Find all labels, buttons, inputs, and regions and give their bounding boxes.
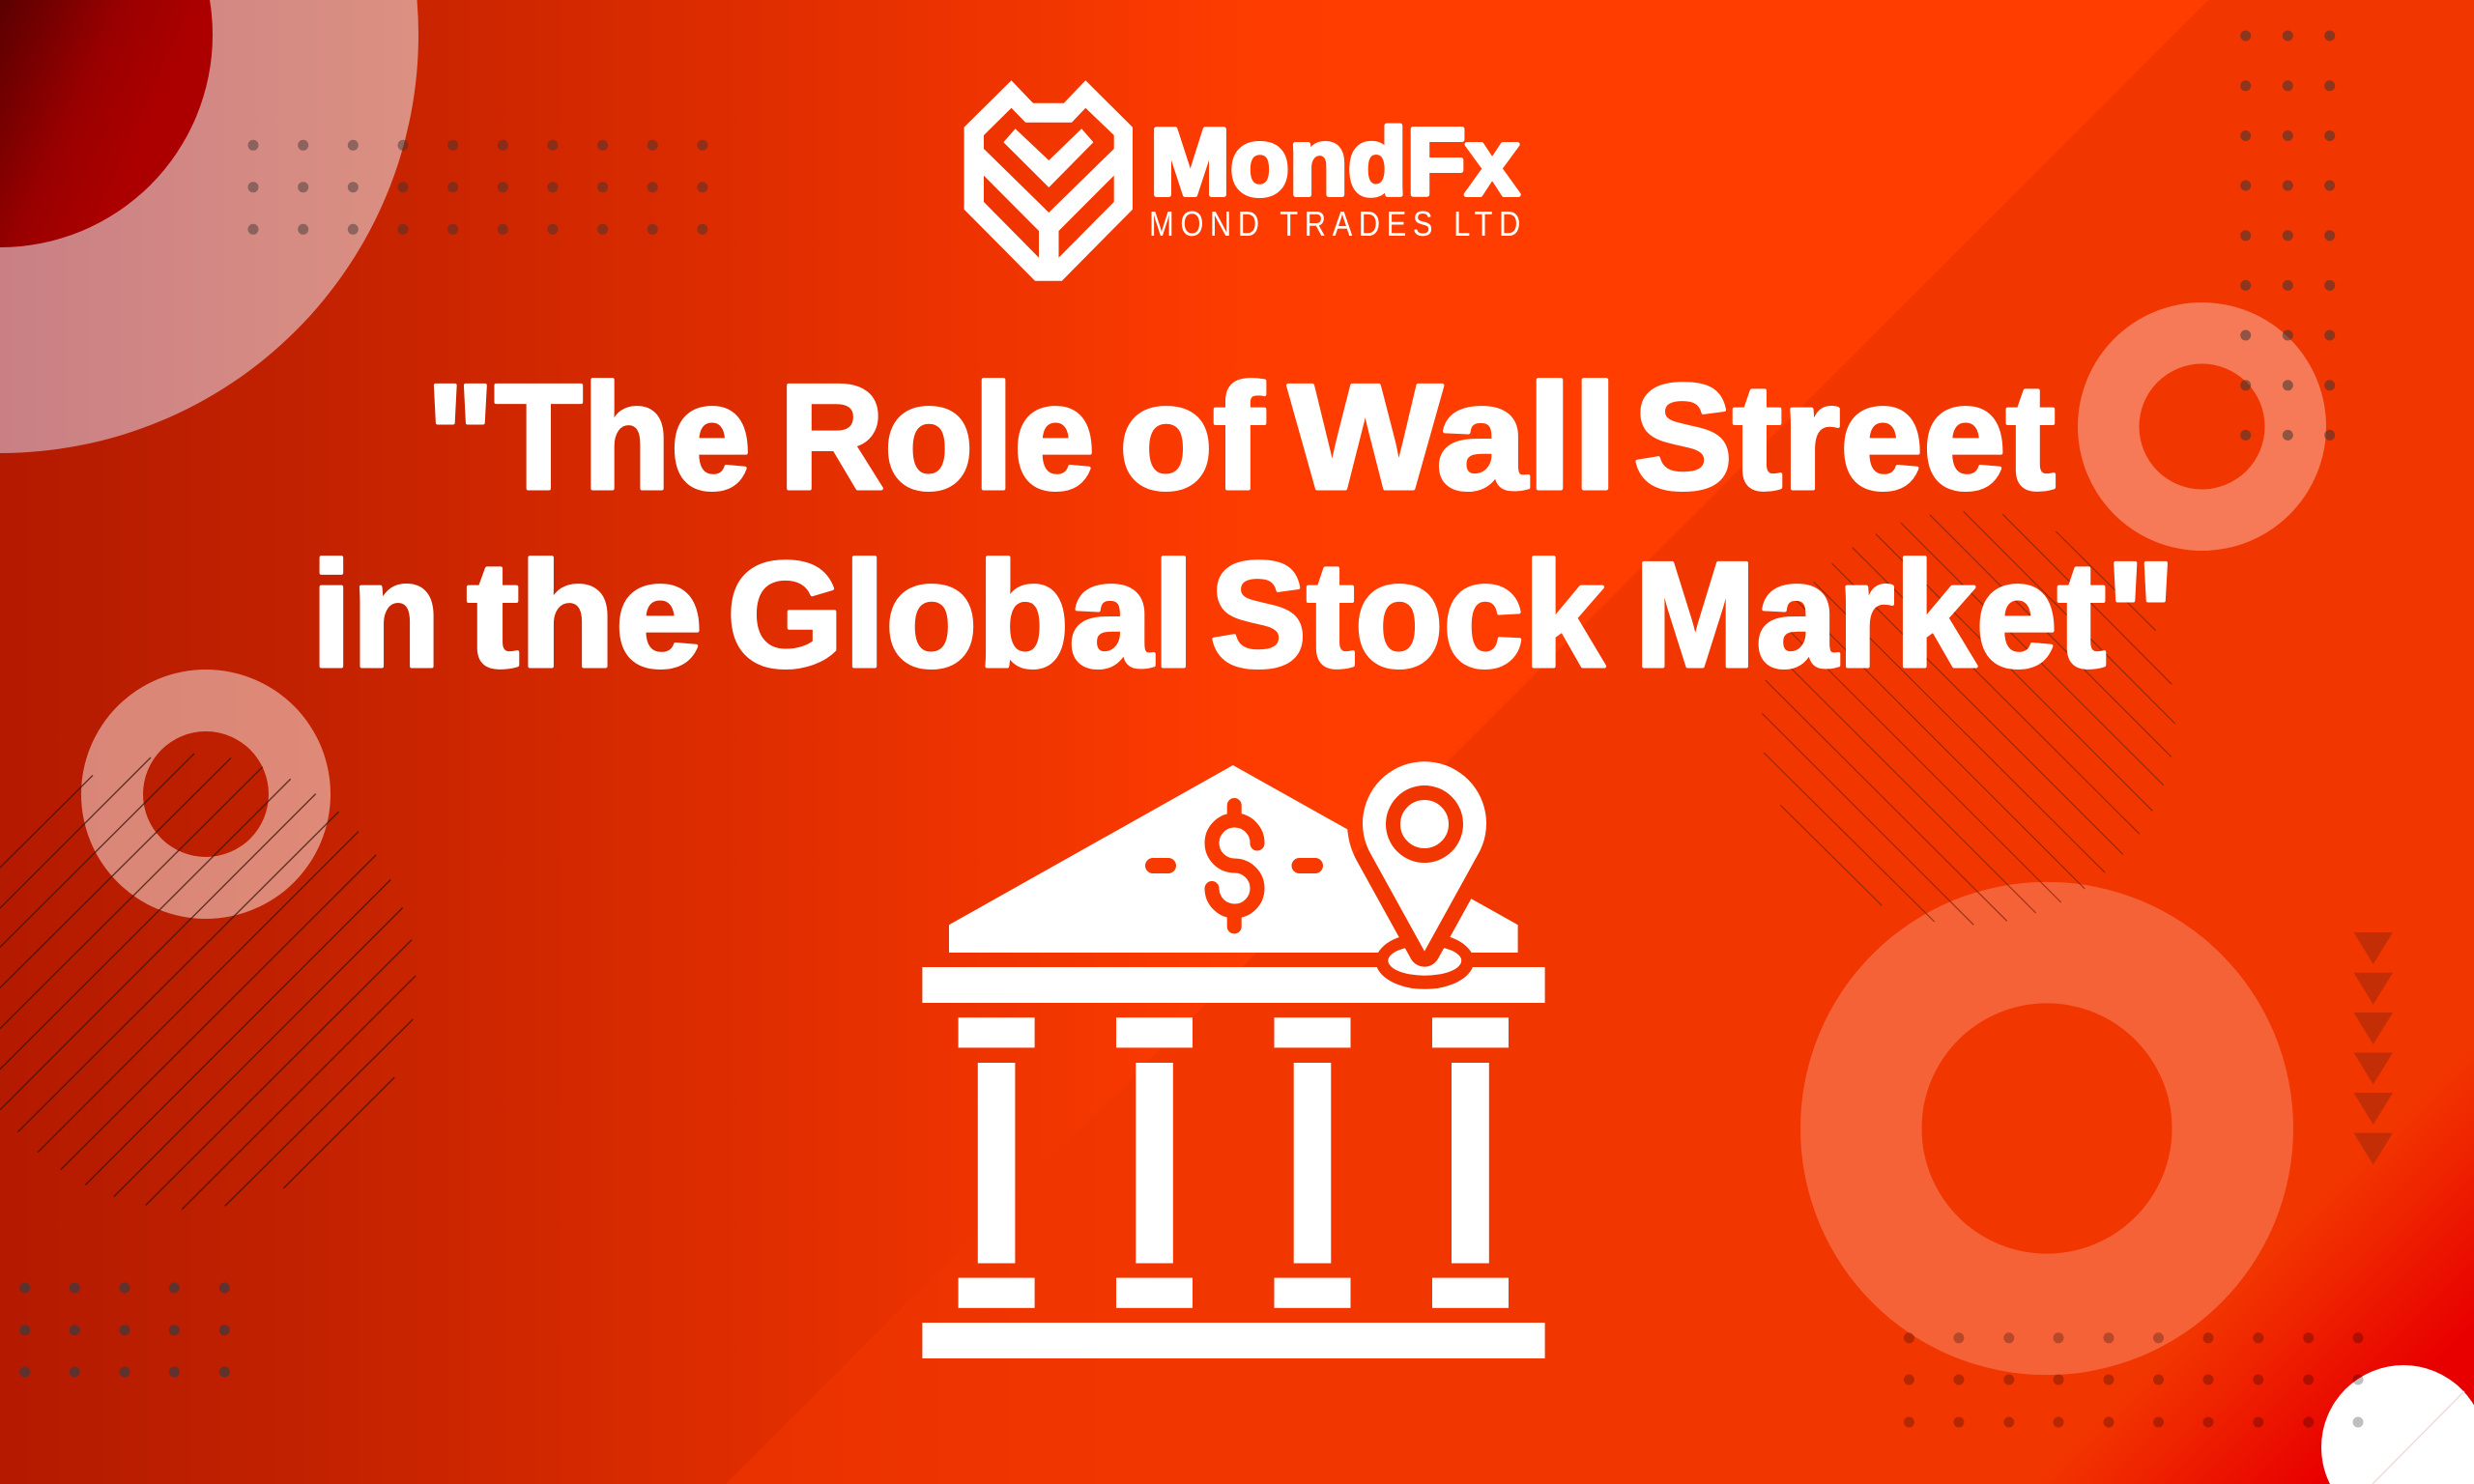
title: in	[311, 531, 441, 698]
column of down-pointing triangles	[2354, 932, 2393, 1165]
title: of	[1119, 354, 1264, 520]
title: Role	[779, 354, 1095, 520]
title: Global	[727, 531, 1194, 698]
dot grid: bottom right	[1909, 1338, 2358, 1422]
icon: bank building with location pin	[922, 761, 1545, 1358]
title: Street	[1633, 354, 2056, 520]
base	[922, 1323, 1545, 1358]
location pin	[1363, 761, 1486, 952]
white circle: bottom-right corner	[2321, 1365, 2474, 1484]
columns	[959, 1017, 1509, 1308]
diagonal hatch: left	[0, 754, 416, 1210]
title: Stock	[1210, 531, 1605, 698]
title	[311, 354, 2175, 698]
dollar sign	[1153, 806, 1315, 927]
decorative ring: large lower right	[1800, 882, 2293, 1375]
title: the	[467, 531, 703, 698]
logo: MondFx	[964, 80, 1520, 281]
dot grid: top right	[2246, 36, 2330, 435]
logo wordmark: MondFx	[1150, 108, 1519, 214]
logo emblem	[964, 80, 1133, 281]
title: "The	[426, 354, 751, 520]
dot grid: bottom left	[25, 1288, 224, 1372]
diagonal hatch: right	[1762, 511, 2175, 925]
title: Market"	[1634, 531, 2175, 698]
logo tagline: MOND TRADES LTD	[1149, 206, 1520, 244]
dot grid: top left	[253, 145, 703, 229]
roof and entablature	[922, 765, 1545, 1003]
decorative ring: left	[81, 670, 331, 919]
decorative ring: top-left corner	[0, 0, 418, 453]
title: Wall	[1288, 354, 1618, 520]
decorative ring: top right	[2078, 302, 2326, 551]
